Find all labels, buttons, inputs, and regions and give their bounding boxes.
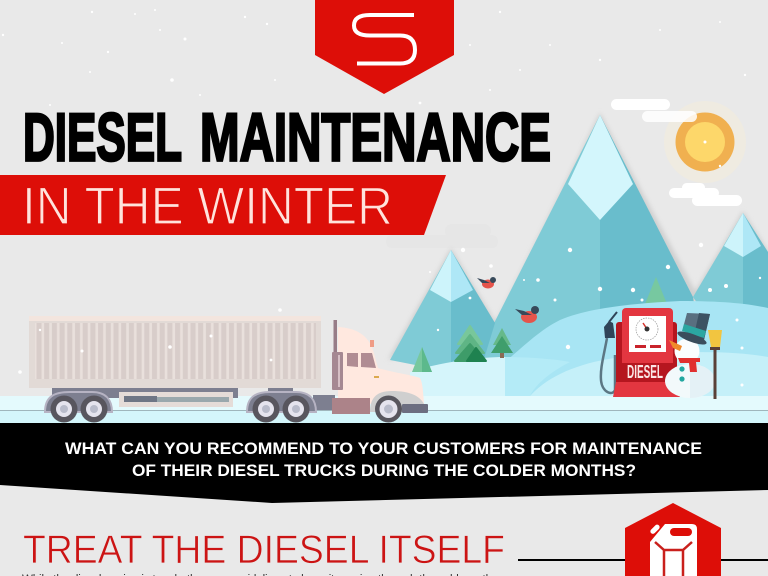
sun	[664, 101, 746, 183]
faint background cloud	[386, 224, 498, 248]
trees	[412, 326, 513, 372]
big mountain	[470, 115, 705, 370]
bird: upper	[477, 277, 496, 288]
subtitle banner: IN THE WINTER	[22, 177, 393, 236]
question band	[0, 423, 768, 503]
clouds	[611, 99, 742, 206]
right mountain	[693, 213, 768, 370]
chassis	[45, 388, 335, 412]
question line two: OF THEIR DIESEL TRUCKS DURING THE COLDER MONTHS?	[132, 461, 636, 480]
snowman	[665, 313, 722, 399]
question line one: WHAT CAN YOU RECOMMEND TO YOUR CUSTOMERS FOR MAINTENANCE	[65, 439, 702, 458]
icon: fuel can badge	[625, 503, 721, 576]
title: MAINTENANCE	[200, 100, 551, 176]
truck	[29, 316, 428, 422]
title	[23, 100, 551, 176]
left mountain	[390, 250, 495, 372]
back tree on hill	[645, 277, 667, 304]
snowflakes	[2, 9, 761, 386]
pump label: DIESEL	[627, 362, 663, 382]
cab	[332, 320, 428, 414]
logo shield	[315, 0, 454, 94]
fuel pump	[601, 308, 680, 397]
mountain shadows	[388, 113, 768, 360]
title: DIESEL	[23, 100, 182, 176]
section rule	[518, 559, 768, 561]
trailer	[29, 316, 321, 388]
ground	[0, 396, 768, 423]
snow hills	[410, 301, 768, 396]
section heading: TREAT THE DIESEL ITSELF	[23, 528, 505, 572]
bird: lower	[515, 306, 539, 323]
wheels	[50, 396, 402, 422]
